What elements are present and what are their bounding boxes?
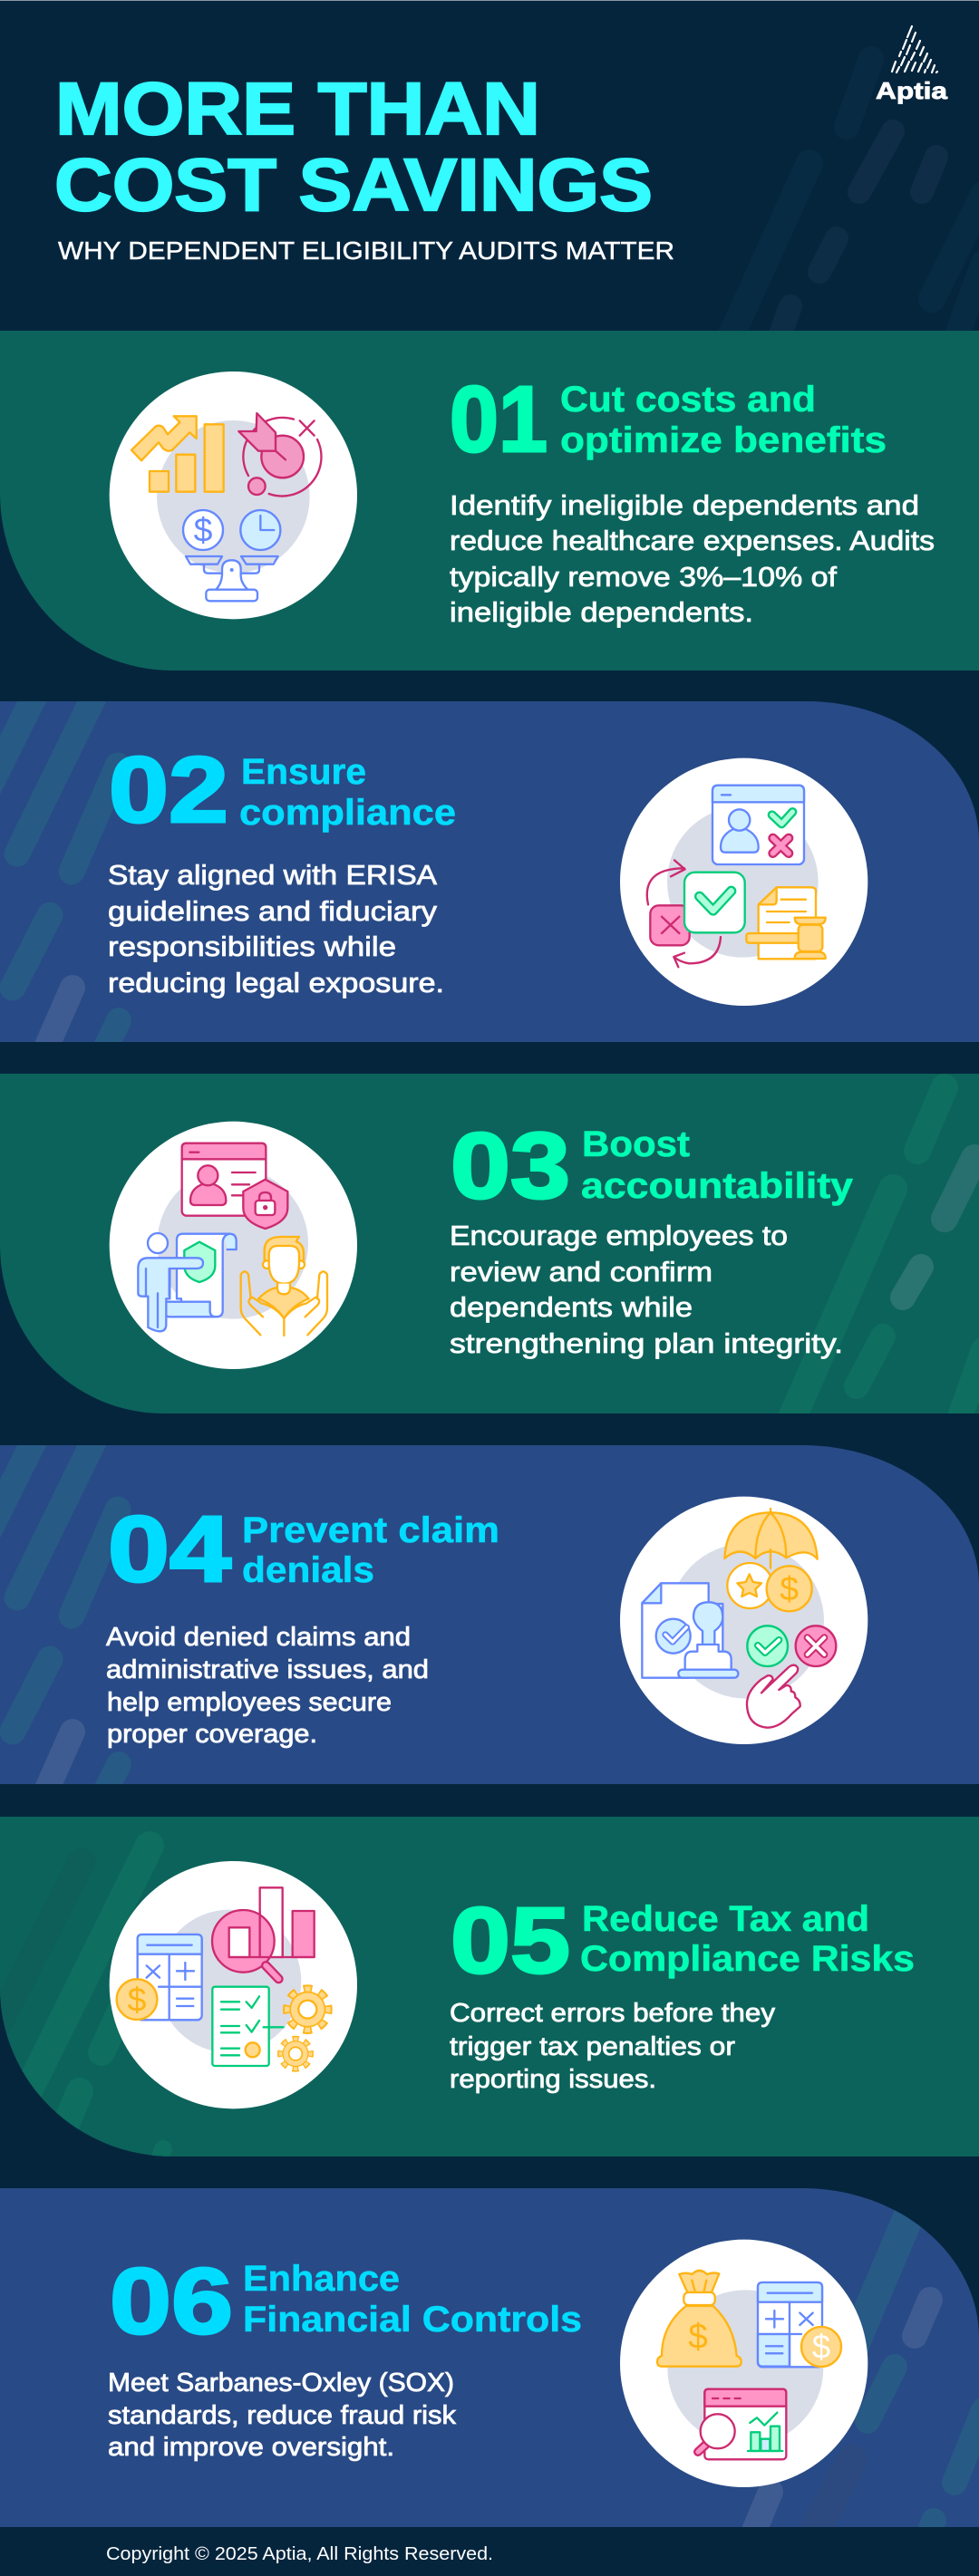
heading 02: Ensure (241, 752, 366, 792)
body text 04 (106, 1623, 429, 1749)
icon: accountability (110, 1122, 357, 1369)
icon: cost savings (110, 371, 357, 619)
body text 04: Avoid denied claims and (106, 1623, 411, 1652)
heading 04 (242, 1510, 499, 1590)
title (54, 68, 653, 227)
heading 05 (580, 1899, 915, 1979)
icon: claim denials (620, 1497, 868, 1744)
icon: claim denials: $ (780, 1569, 799, 1607)
body text 05: Correct errors before they (450, 1999, 776, 2028)
icon: cost savings: $ (194, 511, 213, 549)
body text 05 (450, 1999, 776, 2094)
footer copyright: Copyright © 2025 Aptia, All Rights Reserved. (106, 2544, 493, 2564)
heading 02: compliance (239, 793, 456, 833)
heading 01: Cut costs and (560, 380, 816, 420)
body text 03: strengthening plan integrity. (450, 1327, 843, 1359)
body text 05: reporting issues. (450, 2065, 656, 2094)
body text 01: typically remove 3%–10% of (450, 561, 837, 593)
body text 06 (108, 2369, 457, 2462)
heading 05: Compliance Risks (580, 1939, 915, 1979)
body text 01: ineligible dependents. (450, 596, 753, 628)
body text 02 (108, 859, 444, 999)
heading 01 (560, 380, 887, 460)
logo: Aptia: Aptia (876, 77, 948, 104)
subtitle: WHY DEPENDENT ELIGIBILITY AUDITS MATTER (58, 236, 674, 265)
number 01: 01 (450, 367, 548, 471)
heading 03: Boost (582, 1124, 690, 1164)
icon: financial controls (620, 2240, 868, 2487)
body text 01: reduce healthcare expenses. Audits (450, 525, 935, 556)
body text 04: administrative issues, and (106, 1655, 429, 1684)
logo: Aptia (876, 26, 948, 104)
header stripes (769, 120, 948, 331)
title: COST SAVINGS (54, 144, 653, 227)
heading 06 (243, 2259, 582, 2340)
panel: 04 prevent claim denials (0, 1433, 979, 1803)
body text 05: trigger tax penalties or (450, 2032, 736, 2061)
heading 05: Reduce Tax and (582, 1899, 869, 1939)
body text 03: review and confirm (450, 1256, 712, 1288)
heading 06: Enhance (243, 2259, 400, 2299)
heading 04: Prevent claim (242, 1510, 499, 1550)
icon: tax and compliance: $ (128, 1980, 147, 2018)
body text 03 (450, 1220, 843, 1359)
number 03: 03 (451, 1114, 570, 1218)
body text 03: dependents while (450, 1291, 693, 1323)
panel: 01 cut costs (0, 331, 979, 671)
panel: 06 enhance financial controls (0, 2188, 979, 2555)
title: MORE THAN (55, 68, 540, 150)
panel: 03 boost accountability (0, 1074, 979, 1436)
number 02: 02 (109, 738, 228, 842)
body text 01: Identify ineligible dependents and (450, 489, 919, 521)
body text 06: and improve oversight. (108, 2433, 394, 2462)
icon: financial controls: $ (688, 2317, 708, 2356)
body text 06: standards, reduce fraud risk (108, 2401, 457, 2430)
body text 02: Stay aligned with ERISA (108, 859, 437, 891)
icon: financial controls: $ (812, 2329, 830, 2366)
body text 06: Meet Sarbanes-Oxley (SOX) (108, 2369, 454, 2398)
body text 04: proper coverage. (107, 1720, 317, 1749)
heading 04: denials (242, 1550, 374, 1590)
body text 04: help employees secure (107, 1688, 392, 1717)
number 05: 05 (451, 1888, 570, 1992)
heading 06: Financial Controls (243, 2300, 582, 2340)
number 04: 04 (108, 1497, 231, 1601)
heading 02 (239, 752, 456, 833)
icon: compliance (620, 758, 868, 1006)
panel: 02 ensure compliance (0, 689, 979, 1060)
heading 03 (581, 1124, 854, 1206)
body text 01 (450, 489, 935, 628)
number 06: 06 (110, 2249, 233, 2353)
body text 02: responsibilities while (108, 931, 396, 962)
icon: tax and compliance (110, 1861, 357, 2108)
body text 02: reducing legal exposure. (108, 967, 444, 999)
heading 03: accountability (581, 1166, 854, 1206)
heading 01: optimize benefits (560, 420, 887, 460)
body text 02: guidelines and fiduciary (108, 895, 438, 927)
body text 03: Encourage employees to (450, 1220, 788, 1251)
panel: 05 reduce tax and compliance risks (0, 1817, 979, 2175)
